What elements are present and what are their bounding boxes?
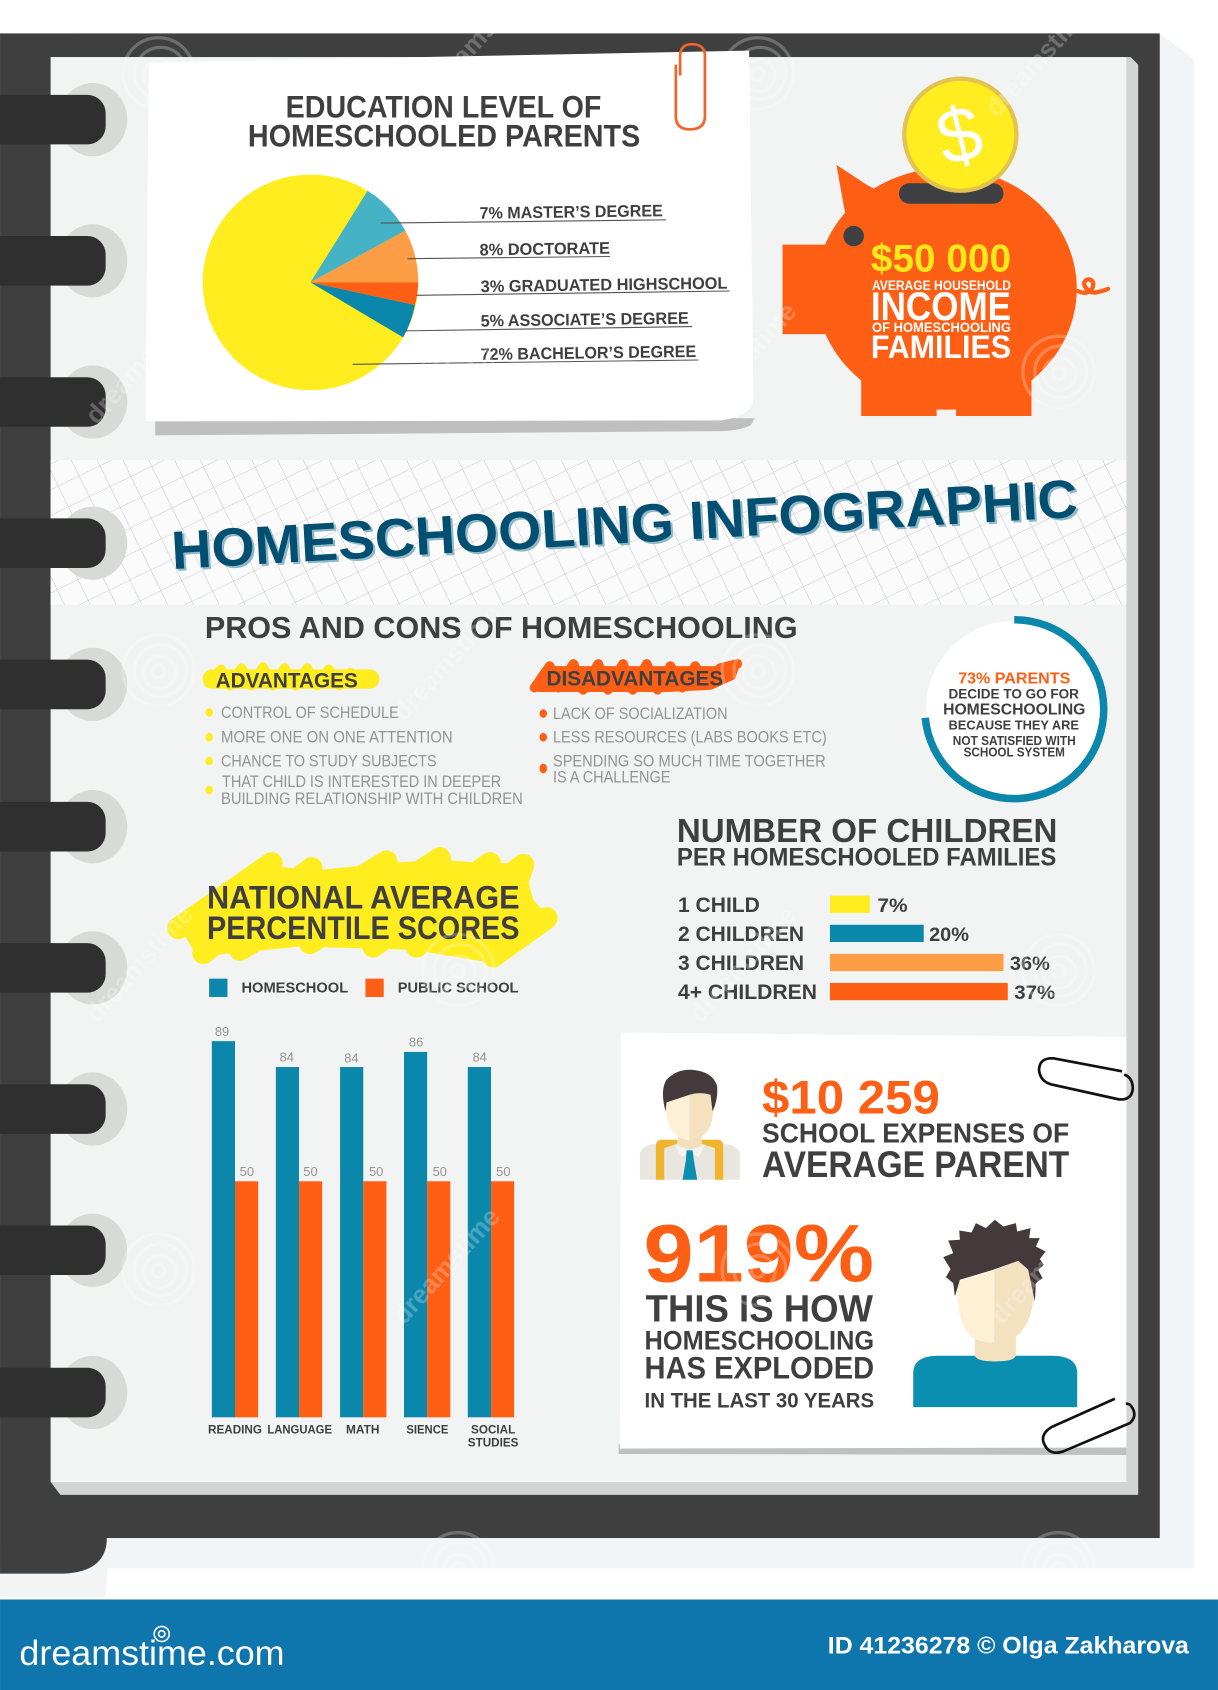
title: HOMESCHOOLING INFOGRAPHIC [170, 469, 1079, 581]
growth text: HOMESCHOOLING [645, 1325, 874, 1355]
advantages items [205, 704, 523, 808]
heading scribble [178, 858, 550, 963]
spiral binding rings [0, 83, 127, 1429]
note paper [146, 51, 755, 435]
bar chart: scores: 50 [369, 1164, 383, 1179]
bar chart: scores: 50 [240, 1164, 254, 1179]
heading: national average: PERCENTILE SCORES [207, 910, 520, 946]
bar chart: children: 7% [877, 895, 908, 917]
growth text [643, 1209, 874, 1413]
bar chart: scores: SOCIAL [471, 1422, 515, 1436]
panel: pros and cons [203, 612, 827, 808]
coin slot [899, 183, 1003, 204]
pie labels: 8% DOCTORATE [479, 239, 610, 259]
footer bar [0, 1599, 1218, 1690]
bar chart: children: 4+ CHILDREN [678, 979, 817, 1004]
advantages list [203, 667, 523, 808]
bar chart: scores: 84 [280, 1050, 294, 1065]
notebook page [51, 57, 1138, 1495]
piggy bank text: $50 000 [871, 238, 1011, 281]
piggy bank text [871, 238, 1011, 365]
pie labels: 7% MASTER’S DEGREE [479, 201, 663, 223]
bar chart: children: 20% [929, 924, 969, 946]
callout text: DECIDE TO GO FOR [949, 686, 1079, 701]
disadvantages items: IS A CHALLENGE [553, 768, 671, 786]
bar chart: scores: 50 [433, 1164, 447, 1179]
heading: education level: EDUCATION LEVEL OF [286, 89, 601, 124]
panel: expenses and growth note [619, 1033, 1134, 1455]
icon: bottom paperclip [1043, 1399, 1134, 1453]
icon: parent [640, 1070, 740, 1180]
bar chart: children: 37% [1014, 982, 1055, 1004]
heading: national average [207, 880, 520, 946]
callout text: SCHOOL SYSTEM [964, 745, 1065, 760]
growth text: IN THE LAST 30 YEARS [645, 1388, 874, 1413]
expenses text: SCHOOL EXPENSES OF [762, 1117, 1069, 1148]
callout text: HOMESCHOOLING [943, 702, 1085, 719]
heading: number of children: PER HOMESCHOOLED FAMILIES [677, 844, 1056, 871]
bar chart: scores: LANGUAGE [267, 1422, 332, 1436]
bar chart: scores: MATH [346, 1422, 379, 1436]
disadvantages list [530, 660, 827, 786]
pie labels [352, 201, 730, 364]
pie labels: 5% ASSOCIATE’S DEGREE [481, 309, 689, 331]
disadvantages items: LESS RESOURCES (LABS BOOKS ETC) [553, 729, 827, 747]
heading: pros and cons: PROS AND CONS OF HOMESCHOOLING [205, 612, 798, 645]
piggy bank text: FAMILIES [871, 329, 1011, 365]
callout text: 73% PARENTS [958, 670, 1070, 687]
panel: number of children [677, 813, 1057, 1004]
bar chart: children [678, 892, 1055, 1004]
footer logo: dreamstime.com [19, 1633, 285, 1673]
disadvantages items: SPENDING SO MUCH TIME TOGETHER [553, 752, 826, 770]
bar chart: scores [208, 1024, 519, 1449]
bar chart: scores: 89 [215, 1024, 229, 1039]
watermark: dreamstime [81, 901, 199, 1028]
growth text: THIS IS HOW [646, 1287, 873, 1329]
watermark [81, 0, 1104, 1604]
expenses text [762, 1071, 1069, 1185]
bar chart: scores: READING [208, 1422, 262, 1436]
disadvantages items [539, 705, 827, 786]
advantages items: THAT CHILD IS INTERESTED IN DEEPER [222, 773, 501, 791]
legend [209, 979, 518, 997]
bar chart: scores: STUDIES [468, 1435, 519, 1449]
icon: orange paperclip [676, 44, 705, 129]
heading: national average: NATIONAL AVERAGE [207, 880, 520, 916]
callout text: BECAUSE THEY ARE [949, 718, 1079, 733]
advantages items: CHANCE TO STUDY SUBJECTS [221, 752, 437, 770]
callout: 73% parents [925, 620, 1104, 799]
panel: education level note [146, 44, 755, 435]
bar chart: children: 2 CHILDREN [678, 921, 804, 946]
title: HOMESCHOOLING INFOGRAPHIC [172, 471, 1081, 583]
bar chart: children: 1 CHILD [678, 892, 760, 917]
piggy bank text: AVERAGE HOUSEHOLD [872, 278, 1011, 293]
pie labels: 72% BACHELOR’S DEGREE [481, 342, 696, 364]
disadvantages scribble [530, 660, 742, 692]
advantages scribble [203, 667, 379, 689]
panel: national average percentile scores [178, 858, 550, 1449]
piggy bank text: INCOME [871, 285, 1011, 329]
bar chart: scores: 84 [472, 1050, 487, 1065]
icon: piggy bank [783, 165, 1108, 416]
watermark: dreamstime [684, 901, 802, 1028]
watermark: dreamstime [986, 1203, 1104, 1330]
callout text [943, 670, 1085, 760]
disadvantages label: DISADVANTAGES [546, 665, 723, 690]
note paper [619, 1033, 1126, 1455]
pie chart [203, 175, 418, 390]
piggy bank text: OF HOMESCHOOLING [872, 320, 1011, 335]
bar chart: scores: SIENCE [406, 1422, 448, 1436]
watermark: dreamstime [388, 1203, 506, 1330]
disadvantages items: LACK OF SOCIALIZATION [553, 705, 728, 723]
growth text: HAS EXPLODED [645, 1351, 874, 1386]
advantages items: MORE ONE ON ONE ATTENTION [221, 729, 453, 747]
watermark: dreamstime [388, 600, 506, 726]
footer credit: ID 41236278 © Olga Zakharova [828, 1633, 1190, 1659]
panel: piggy bank income [783, 77, 1108, 416]
bar chart: scores: 50 [496, 1164, 511, 1179]
bar chart: children: 3 CHILDREN [678, 950, 804, 975]
pie labels: 3% GRADUATED HIGHSCHOOL [481, 274, 728, 296]
progress ring [925, 620, 1104, 799]
advantages items: BUILDING RELATIONSHIP WITH CHILDREN [221, 790, 523, 808]
grid band [51, 460, 1126, 605]
advantages items: CONTROL OF SCHEDULE [221, 704, 399, 722]
watermark: dreamstime [684, 298, 802, 424]
heading: number of children: NUMBER OF CHILDREN [677, 813, 1057, 850]
icon: dollar coin [902, 77, 1019, 193]
watermark: dreamstime [81, 303, 199, 430]
heading: number of children [677, 813, 1057, 871]
bar chart: scores: 86 [409, 1035, 423, 1050]
pig eye [843, 226, 864, 246]
expenses text: $10 259 [762, 1071, 940, 1124]
heading: education level [248, 89, 640, 154]
advantages label: ADVANTAGES [216, 668, 358, 693]
icon: boy [913, 1220, 1077, 1407]
bar chart: scores: 84 [344, 1051, 359, 1066]
icon: dollar coin: $ [928, 89, 991, 183]
expenses text: AVERAGE PARENT [762, 1144, 1069, 1185]
icon: top paperclip [1039, 1058, 1133, 1099]
bar chart: scores: 50 [303, 1164, 318, 1179]
bar chart: children: 36% [1010, 953, 1050, 975]
callout text: NOT SATISFIED WITH [953, 733, 1076, 748]
growth text: 919% [643, 1209, 874, 1300]
legend: PUBLIC SCHOOL [398, 980, 518, 997]
legend: HOMESCHOOL [241, 980, 348, 997]
heading: education level: HOMESCHOOLED PARENTS [248, 119, 640, 154]
